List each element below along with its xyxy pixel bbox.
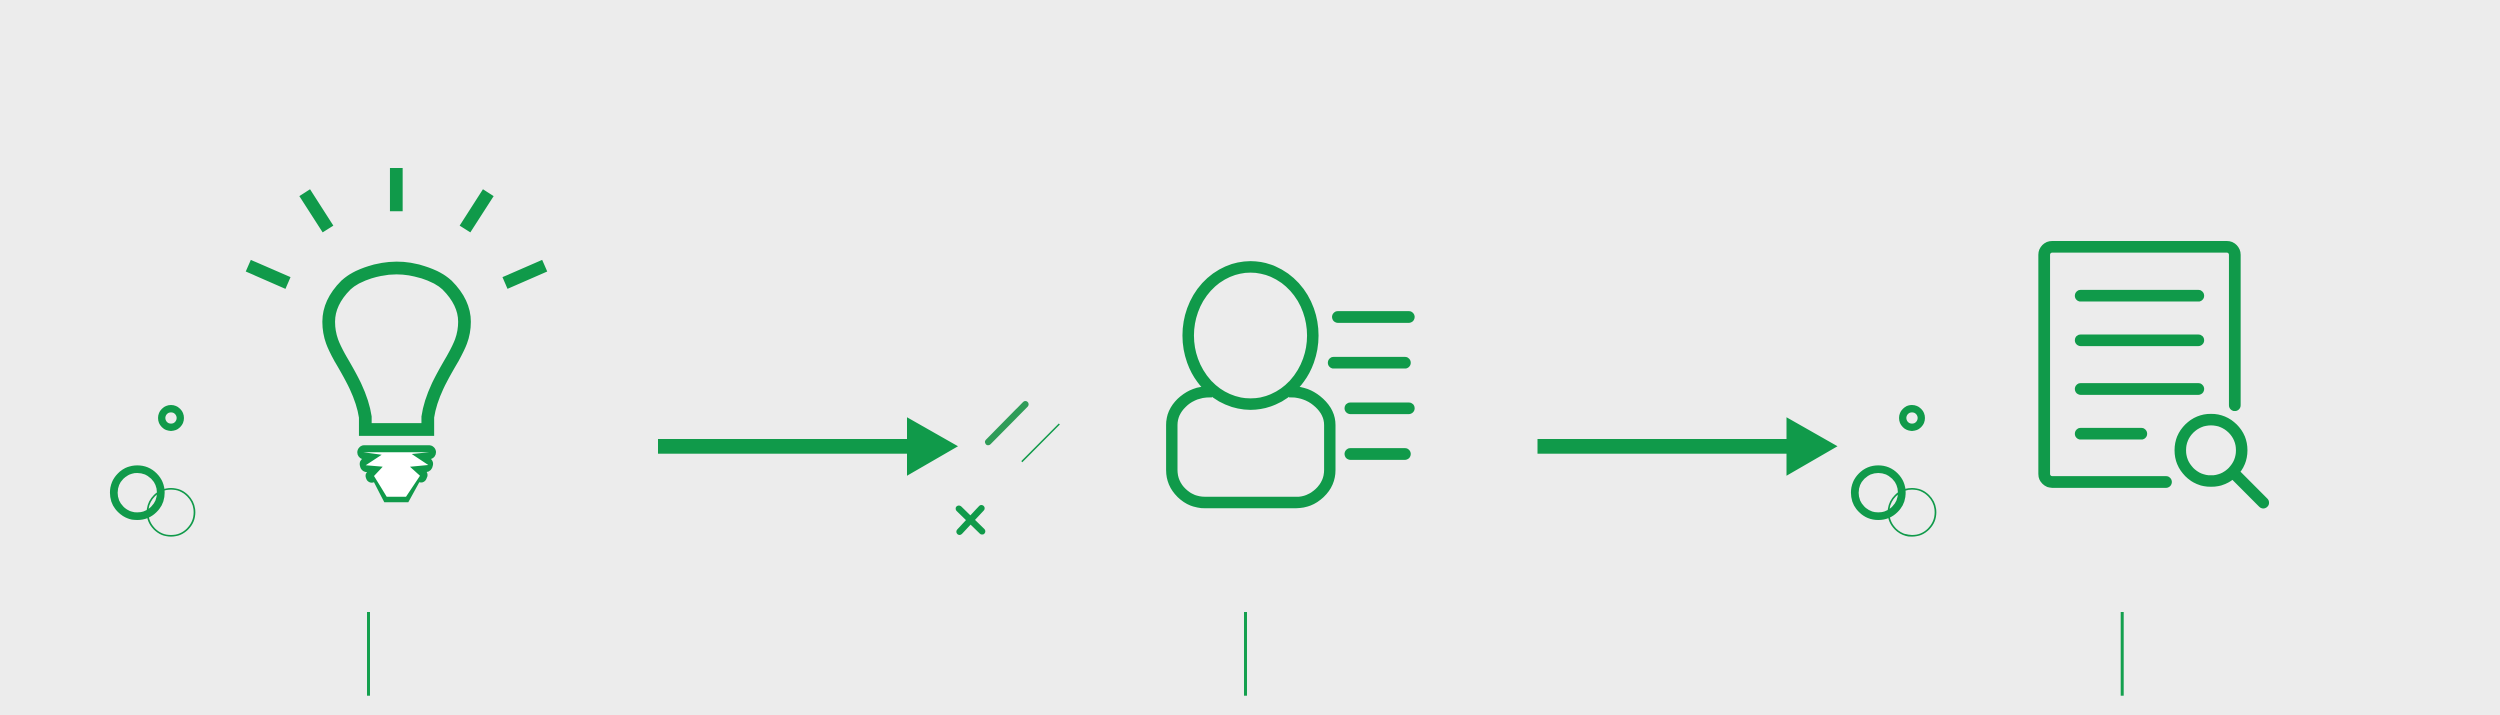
bulb glass xyxy=(329,268,464,430)
icon: person profile with text lines xyxy=(1172,267,1409,502)
magnifier xyxy=(2180,420,2263,503)
decoration: circles right xyxy=(1855,409,1936,536)
decoration: circles left xyxy=(114,409,194,536)
divider: first xyxy=(367,612,370,696)
arrow: second xyxy=(1538,417,1838,476)
bulb screw base xyxy=(357,445,436,502)
divider: second xyxy=(1244,612,1247,696)
person body xyxy=(1172,392,1330,502)
person head xyxy=(1188,267,1313,404)
arrow: first xyxy=(658,417,958,476)
profile text lines xyxy=(1334,317,1409,454)
decoration: slashes and cross xyxy=(959,404,1059,532)
icon: document with magnifier xyxy=(2044,247,2263,503)
icon: light bulb with rays xyxy=(248,168,545,502)
divider: third xyxy=(2121,612,2124,696)
document outline xyxy=(2044,247,2235,482)
rays of light xyxy=(248,168,545,283)
document text lines xyxy=(2081,296,2198,434)
